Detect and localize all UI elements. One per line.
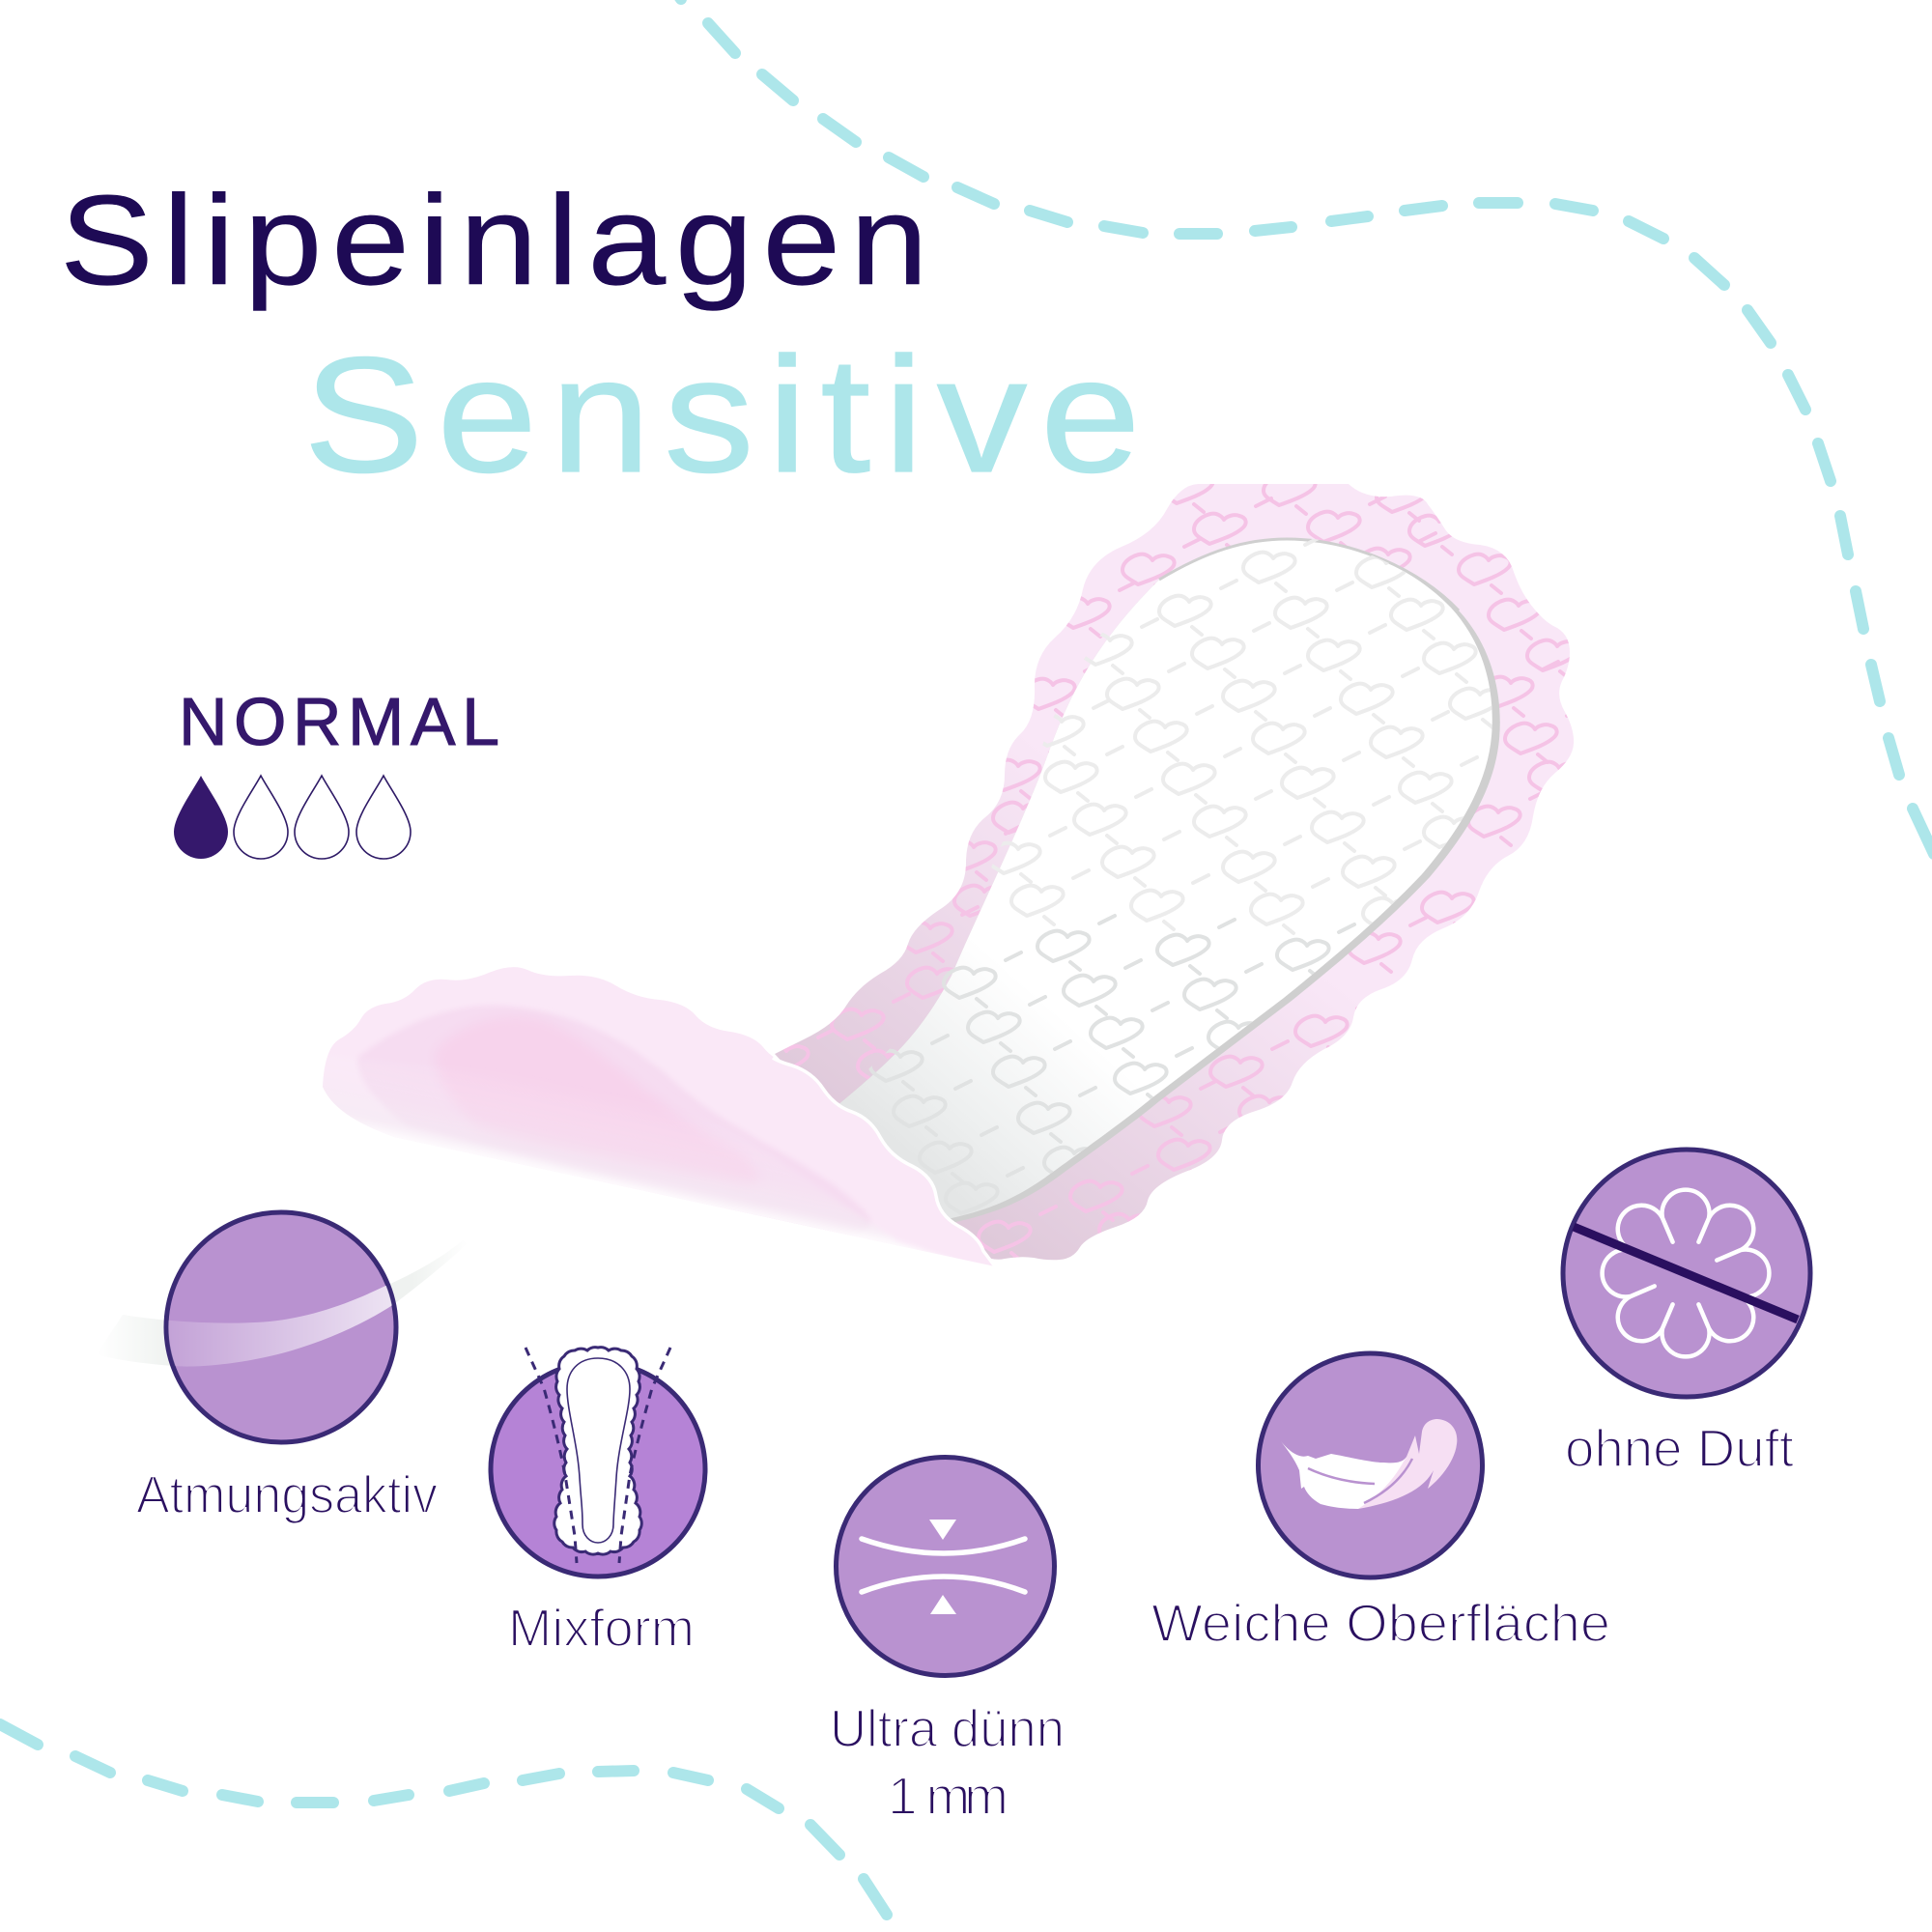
absorbency heading: NORMAL: NORMAL bbox=[179, 684, 499, 759]
icon: breathable circle bbox=[164, 1209, 398, 1445]
folded front flap bbox=[323, 967, 993, 1265]
icon: crossed-out flower bbox=[1563, 1150, 1810, 1397]
label: Mixform bbox=[508, 1598, 695, 1658]
feature: Atmungsaktiv bbox=[134, 1209, 439, 1522]
feature: Ultra dünn bbox=[830, 1457, 1065, 1826]
absorbency drops bbox=[174, 776, 411, 859]
icon: empty drop 4 bbox=[356, 776, 411, 859]
label line 2: 1 mm bbox=[888, 1766, 1009, 1826]
pad backing with pink hearts bbox=[756, 458, 1606, 1261]
icon: filled drop bbox=[174, 776, 228, 859]
subtitle: Sensitive: Sensitive bbox=[303, 323, 1141, 506]
icon: thinness bbox=[837, 1457, 1055, 1675]
feature: ohne Duft bbox=[1563, 1150, 1810, 1478]
label: ohne Duft bbox=[1565, 1418, 1794, 1478]
icon: mixed-shape liner bbox=[491, 1348, 705, 1577]
dashed curve: top right bbox=[676, 0, 1932, 854]
swoosh shadow outside circle bbox=[97, 1240, 468, 1367]
product illustration: panty liner bbox=[290, 458, 1606, 1285]
absorbent core with grey rim bbox=[823, 536, 1527, 1223]
label: Weiche Oberfläche bbox=[1151, 1593, 1610, 1653]
label line 1: Ultra dünn bbox=[830, 1698, 1065, 1758]
label: Atmungsaktiv bbox=[136, 1464, 438, 1524]
feature: Mixform bbox=[491, 1348, 705, 1658]
title: Slipeinlagen: Slipeinlagen bbox=[60, 169, 928, 312]
icon: empty drop 2 bbox=[234, 776, 288, 859]
feature: Weiche Oberfläche bbox=[1151, 1353, 1610, 1653]
dashed curve: bottom left bbox=[0, 1724, 887, 1915]
icon: feather bbox=[1258, 1353, 1482, 1577]
icon: empty drop 3 bbox=[295, 776, 349, 859]
